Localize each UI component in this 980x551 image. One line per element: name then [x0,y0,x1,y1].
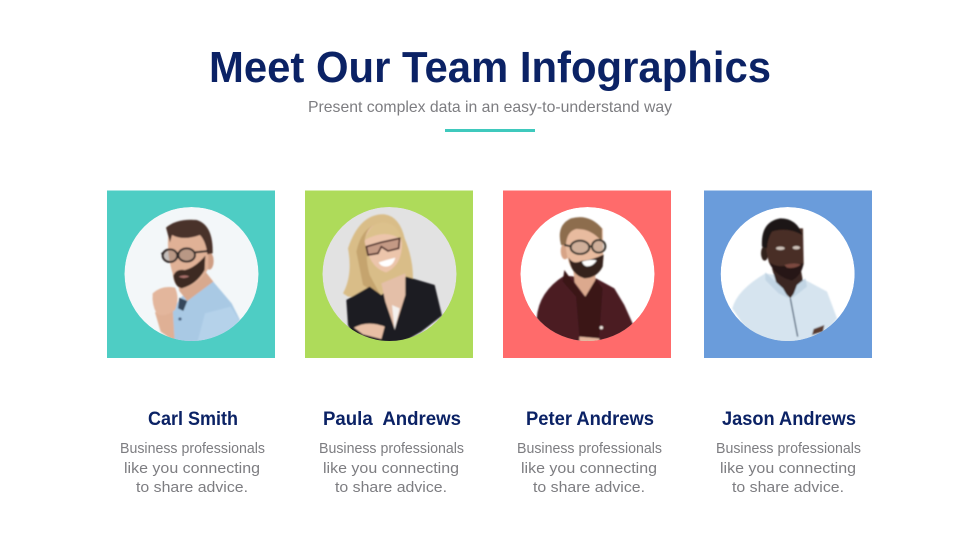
text block: Paula Andrews: Paula Andrews [323,409,461,430]
text block: Peter Andrews: Business professionals [517,441,662,457]
subtitle: Present complex data in an easy-to-understand way [308,99,672,116]
text block: Peter Andrews: to share advice. [533,479,645,496]
text block: Paula Andrews [319,409,464,496]
panel: Peter Andrews portrait card [503,190,671,358]
title underline [445,129,535,132]
text block: Jason Andrews [716,409,861,496]
panel: Carl Smith portrait card [107,190,275,358]
text block: Peter Andrews: Peter Andrews [526,409,654,430]
text block: Peter Andrews: like you connecting [521,460,657,477]
text block: Carl Smith: Carl Smith [148,409,238,430]
text block: Jason Andrews: Business professionals [716,441,861,457]
text block: Peter Andrews [517,409,662,496]
portrait: Carl Smith [124,207,258,345]
panel: Paula Andrews portrait card [305,190,473,358]
portrait: Jason Andrews [721,207,855,345]
text block: Carl Smith: to share advice. [136,479,248,496]
title: Meet Our Team Infographics [209,43,771,92]
portrait: Paula Andrews [322,207,456,345]
text block: Paula Andrews: like you connecting [323,460,459,477]
text block: Carl Smith: Business professionals [120,441,265,457]
text block: Jason Andrews: Jason Andrews [722,409,856,430]
text block: Paula Andrews: Business professionals [319,441,464,457]
text block: Jason Andrews: like you connecting [720,460,856,477]
text block: Jason Andrews: to share advice. [732,479,844,496]
panel: Jason Andrews portrait card [704,190,872,358]
text block: Carl Smith [120,409,265,496]
portrait: Peter Andrews [520,207,654,345]
text block: Paula Andrews: to share advice. [335,479,447,496]
text block: Carl Smith: like you connecting [124,460,260,477]
